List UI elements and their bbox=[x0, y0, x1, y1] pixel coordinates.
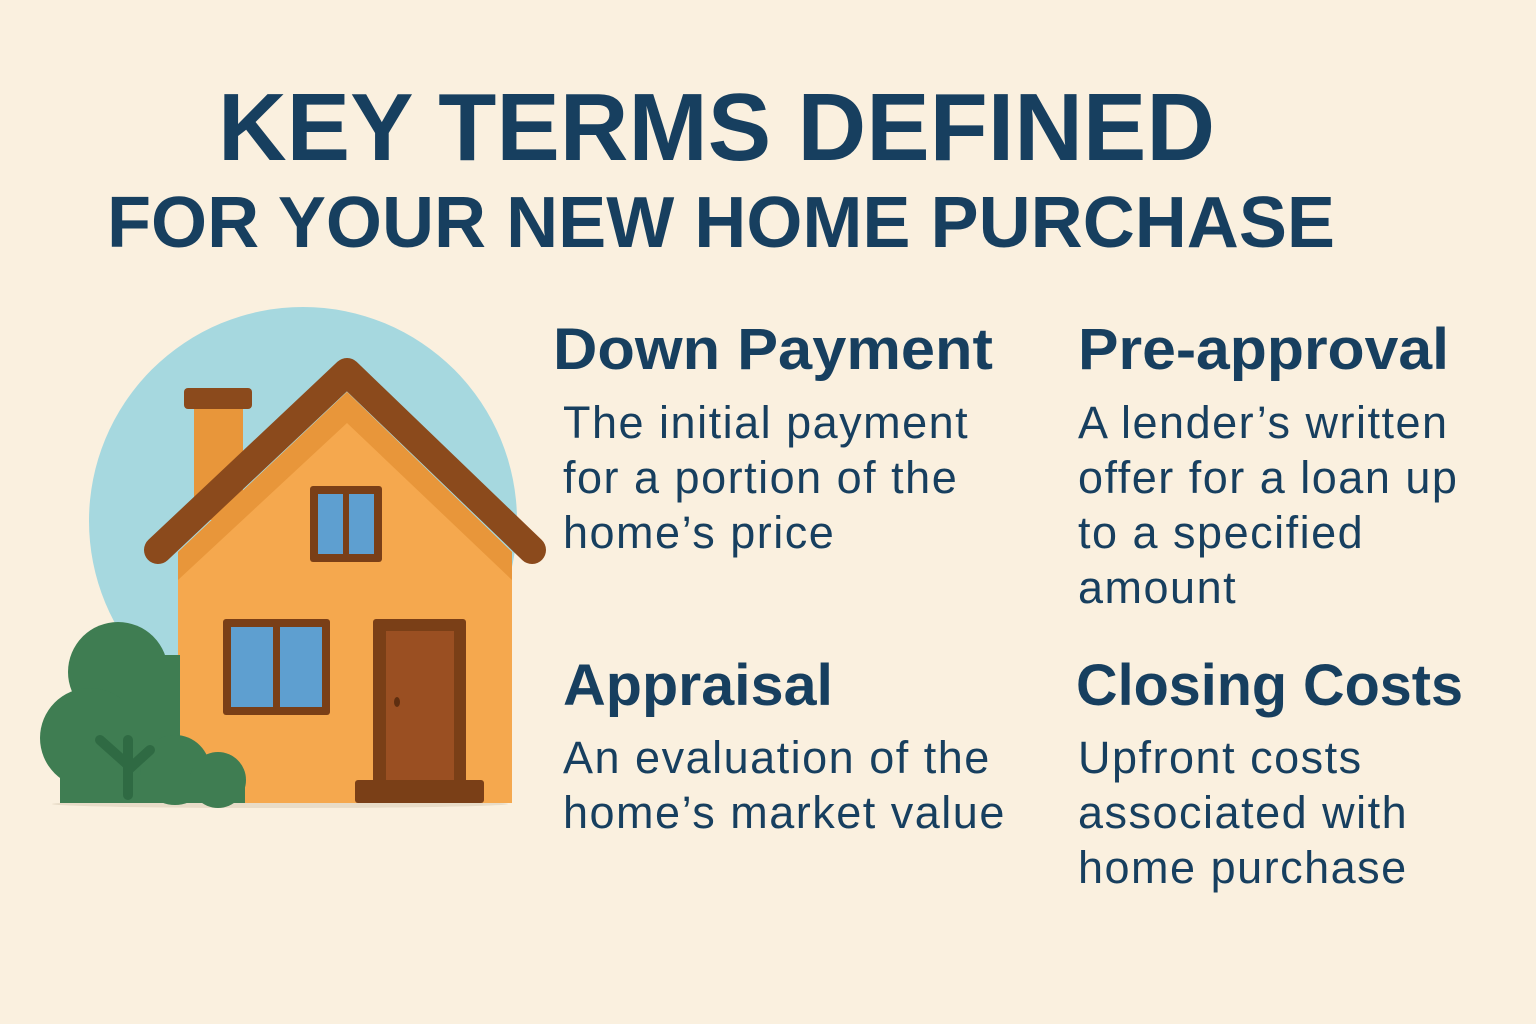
term: Pre-approval: to a specified bbox=[1078, 507, 1364, 558]
term: Pre-approval: offer for a loan up bbox=[1078, 452, 1458, 503]
term: Closing Costs: Upfront costs bbox=[1078, 732, 1363, 783]
term: Pre-approval bbox=[1078, 317, 1458, 613]
term: Pre-approval: Pre-approval bbox=[1078, 317, 1449, 382]
term: Down Payment: for a portion of the bbox=[563, 452, 958, 503]
term: Pre-approval: amount bbox=[1078, 562, 1237, 613]
subtitle: FOR YOUR NEW HOME PURCHASE bbox=[107, 183, 1335, 263]
lower window bbox=[223, 619, 330, 715]
title: KEY TERMS DEFINED bbox=[218, 74, 1215, 181]
term: Down Payment: home’s price bbox=[563, 507, 835, 558]
chimney bbox=[184, 388, 252, 520]
term: Closing Costs: associated with bbox=[1078, 787, 1408, 838]
upper window bbox=[310, 486, 382, 562]
term: Appraisal bbox=[563, 653, 1006, 838]
term: Closing Costs: Closing Costs bbox=[1076, 653, 1463, 718]
term: Appraisal: home’s market value bbox=[563, 787, 1006, 838]
illustration: house bbox=[40, 307, 532, 808]
bushes bbox=[40, 622, 246, 808]
term: Down Payment: The initial payment bbox=[563, 397, 969, 448]
term: Down Payment bbox=[553, 317, 993, 558]
term: Closing Costs bbox=[1076, 653, 1463, 893]
term: Closing Costs: home purchase bbox=[1078, 842, 1408, 893]
door bbox=[355, 619, 484, 803]
term: Pre-approval: A lender’s written bbox=[1078, 397, 1449, 448]
term: Down Payment: Down Payment bbox=[553, 317, 993, 382]
term: Appraisal: Appraisal bbox=[563, 653, 833, 718]
roof bbox=[158, 372, 532, 550]
term: Appraisal: An evaluation of the bbox=[563, 732, 991, 783]
